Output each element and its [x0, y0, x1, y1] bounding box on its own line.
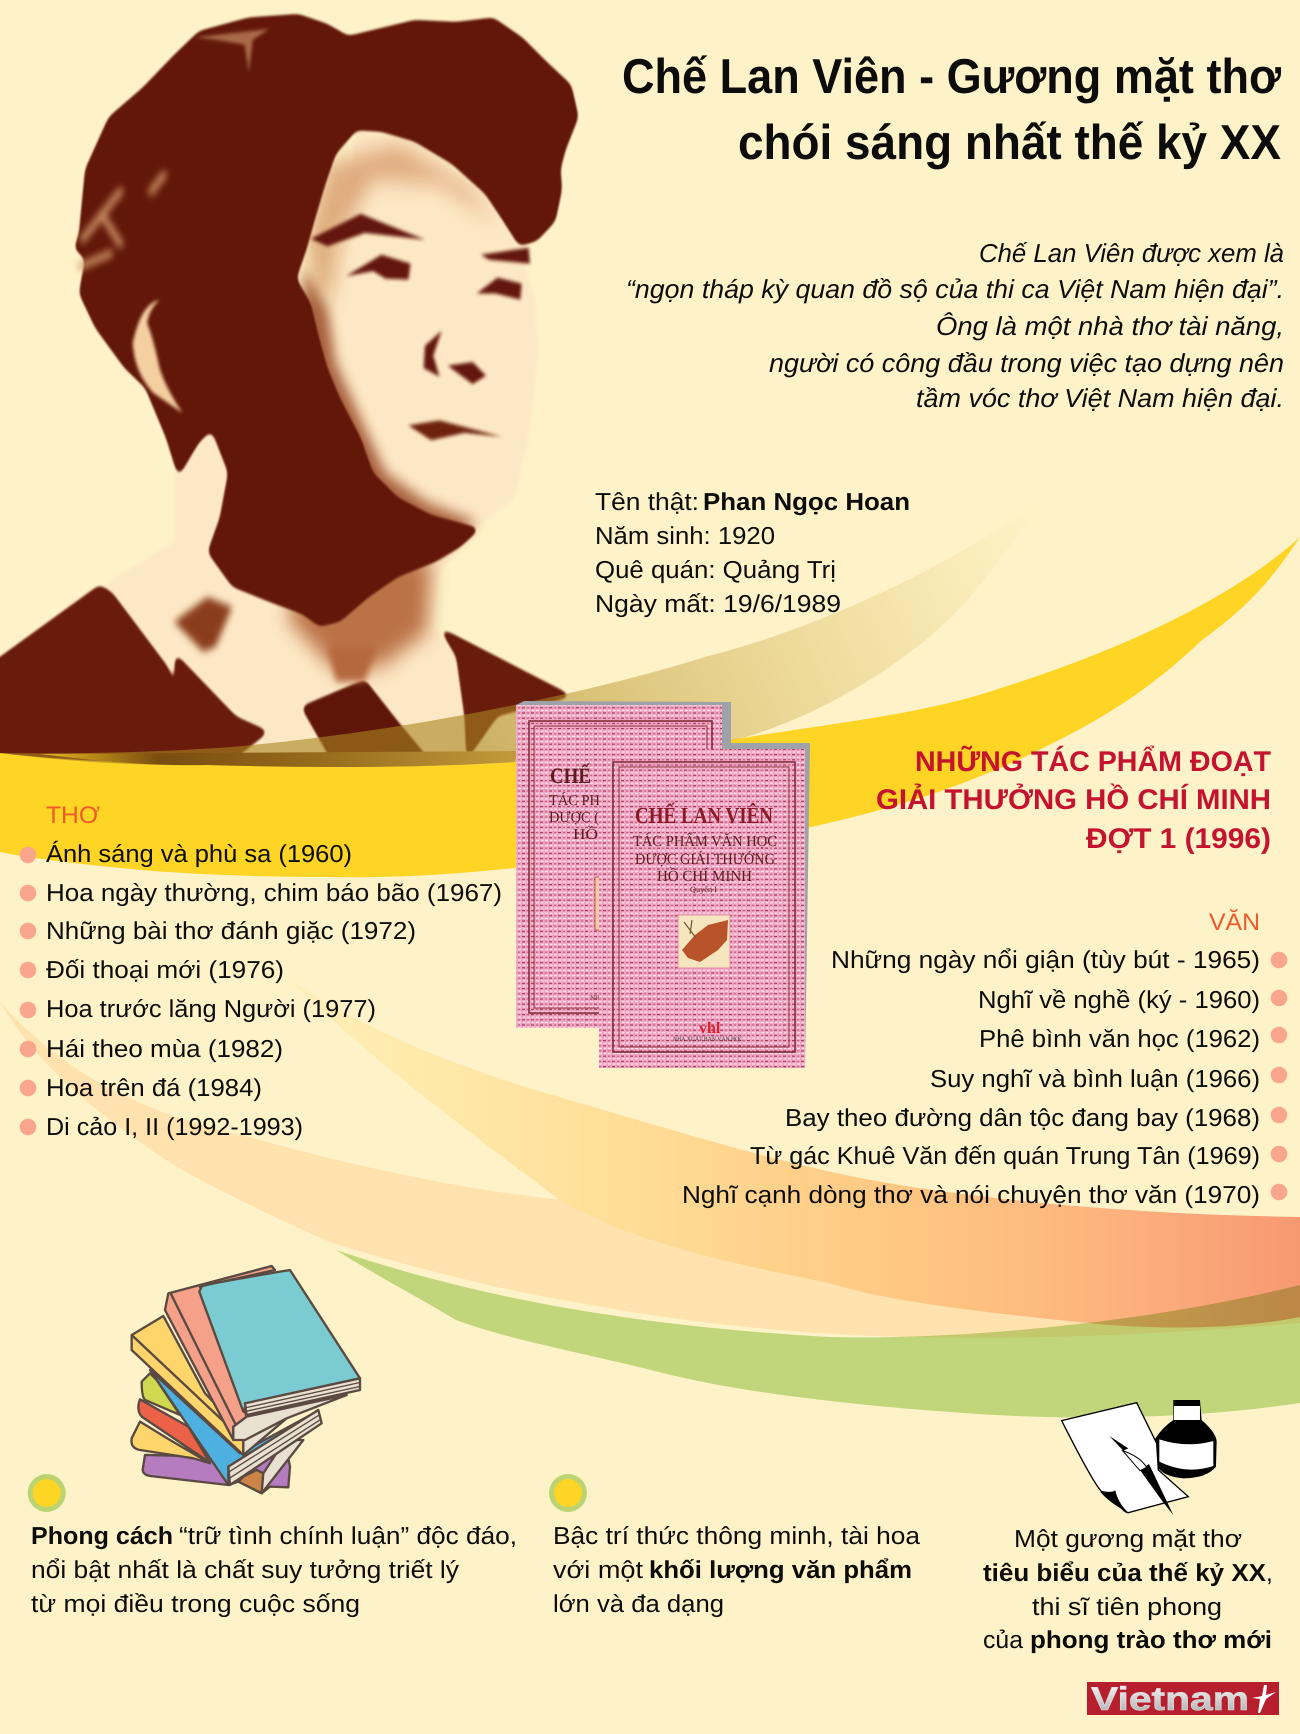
prose list	[682, 909, 1287, 1209]
intro quote: tầm vóc thơ Việt Nam hiện đại.	[916, 383, 1284, 413]
front book	[599, 743, 810, 1068]
mouth	[408, 420, 502, 440]
paper	[1062, 1403, 1188, 1513]
award heading: ĐỢT 1 (1996)	[1086, 823, 1271, 855]
biography facts: Năm sinh: 1920	[595, 523, 775, 550]
hair highlights left	[81, 175, 164, 266]
skin and collar	[104, 130, 539, 754]
ribbon: yellow	[0, 537, 1300, 877]
logo: Vietnam+: Vietnam	[1091, 1680, 1249, 1717]
legacy point: ,	[1266, 1560, 1273, 1587]
intro quote: Ông là một nhà thơ tài năng,	[936, 311, 1284, 341]
prose list: Nghĩ về nghề (ký - 1960)	[978, 987, 1260, 1014]
front book: HỒ CHÍ MINH	[657, 867, 752, 885]
bullet	[549, 1474, 587, 1512]
intro quote: “ngọn tháp kỳ quan đồ sộ của thi ca Việt Nam hiện đại”.	[626, 274, 1284, 304]
pen	[1109, 1436, 1173, 1515]
poetry heading: THƠ	[46, 802, 100, 829]
back book: CHẾ	[550, 763, 591, 788]
prose list: Những ngày nổi giận (tùy bút - 1965)	[831, 947, 1260, 974]
tie	[301, 679, 431, 761]
prose list: Bay theo đường dân tộc đang bay (1968)	[785, 1105, 1260, 1132]
ribbon: pale peach	[0, 1002, 1300, 1338]
intro quote: người có công đầu trong việc tạo dựng nên	[769, 348, 1284, 378]
portrait photo	[0, 14, 579, 761]
ear	[133, 300, 182, 413]
front book: Quyển I	[690, 885, 717, 894]
back book: ĐƯỢC (	[549, 810, 599, 826]
back book	[516, 701, 731, 1028]
legacy point: tiêu biểu của thế kỷ XX	[983, 1560, 1267, 1587]
biography facts: Ngày mất: 19/6/1989	[595, 591, 841, 618]
cover artwork	[678, 915, 730, 968]
award heading: NHỮNG TÁC PHẨM ĐOẠT	[915, 745, 1272, 778]
book covers	[516, 701, 810, 1068]
jacket right	[437, 626, 574, 761]
intellect point: khối lượng văn phẩm	[649, 1557, 912, 1584]
ribbon overlap strip	[40, 751, 520, 767]
left eye	[346, 255, 410, 280]
cheek shadow edge	[303, 269, 477, 552]
style point	[28, 1474, 517, 1618]
hair highlight top	[195, 29, 269, 72]
intellect point: lớn và đa dạng	[553, 1591, 724, 1618]
back book: TÁC PH	[549, 792, 600, 809]
poetry list: Những bài thơ đánh giặc (1972)	[46, 918, 416, 945]
title	[622, 50, 1281, 170]
right eye	[477, 278, 522, 299]
intro quote: Chế Lan Viên được xem là	[979, 238, 1284, 268]
poetry list	[20, 802, 502, 1141]
logo: Vietnam+	[1087, 1680, 1279, 1717]
back book: NHÀ	[590, 993, 605, 1002]
front book: ĐƯỢC GIẢI THƯỞNG	[635, 850, 775, 868]
intellect point: Bậc trí thức thông minh, tài hoa	[553, 1523, 920, 1550]
front book: CHẾ LAN VIÊN	[635, 802, 773, 828]
award heading: GIẢI THƯỞNG HỒ CHÍ MINH	[876, 783, 1271, 816]
biography facts: Quê quán: Quảng Trị	[595, 557, 836, 584]
legacy point: của	[983, 1627, 1023, 1654]
poetry list: Hoa trước lăng Người (1977)	[46, 996, 376, 1023]
intro quote	[626, 238, 1284, 413]
biography facts: Tên thật:	[595, 489, 699, 516]
style point: Phong cách	[31, 1523, 173, 1550]
style point: từ mọi điều trong cuộc sống	[31, 1591, 360, 1618]
jacket left	[0, 585, 269, 761]
award heading	[876, 745, 1272, 855]
poetry list: Hoa trên đá (1984)	[46, 1075, 262, 1102]
ribbon: orange gradient	[290, 980, 1300, 1327]
hair and face shadow	[74, 14, 579, 627]
front book: NHÀ XUẤT BẢN VĂN HỌC	[673, 1035, 743, 1043]
back book: HỒ	[573, 825, 598, 843]
neck shading	[286, 557, 431, 667]
nose	[424, 331, 442, 377]
prose heading: VĂN	[1209, 909, 1260, 936]
legacy point: Một gương mặt thơ	[1014, 1526, 1242, 1553]
legacy point	[983, 1526, 1273, 1654]
icon: paper, pen and ink bottle	[1062, 1400, 1217, 1515]
front book: TÁC PHẨM VĂN HỌC	[633, 832, 777, 850]
biography facts	[595, 489, 910, 618]
prose list: Từ gác Khuê Văn đến quán Trung Tân (1969)	[750, 1143, 1260, 1170]
right eyebrow	[481, 248, 530, 264]
nostril	[448, 362, 486, 384]
ink bottle	[1155, 1400, 1217, 1478]
prose list: Nghĩ cạnh dòng thơ và nói chuyện thơ văn (1970)	[682, 1182, 1260, 1209]
poetry list: Hoa ngày thường, chim báo bão (1967)	[46, 880, 502, 907]
forehead shading	[307, 144, 498, 298]
prose list: Suy nghĩ và bình luận (1966)	[930, 1066, 1260, 1093]
poetry list: Ánh sáng và phù sa (1960)	[46, 840, 352, 868]
left eyebrow	[311, 214, 425, 246]
intellect point	[549, 1474, 920, 1618]
poetry list: Hái theo mùa (1982)	[46, 1036, 283, 1063]
legacy point: thi sĩ tiên phong	[1032, 1594, 1222, 1621]
style point: nổi bật nhất là chất suy tưởng triết lý	[31, 1557, 460, 1584]
poetry list: Đối thoại mới (1976)	[46, 957, 284, 984]
poetry list: Di cảo I, II (1992-1993)	[46, 1114, 303, 1141]
ribbon: green	[336, 1250, 1300, 1417]
tie knot shadow	[328, 647, 377, 682]
legacy point: phong trào thơ mới	[1030, 1627, 1272, 1654]
biography facts: Phan Ngọc Hoan	[703, 489, 910, 516]
icon: stack of books	[131, 1266, 360, 1493]
bullet	[28, 1474, 66, 1512]
prose list: Phê bình văn học (1962)	[979, 1026, 1260, 1053]
style point: “trữ tình chính luận” độc đáo,	[179, 1523, 517, 1550]
front book: vhl	[699, 1020, 721, 1037]
collar shadow	[174, 597, 232, 652]
ribbon: translucent tan	[0, 497, 1045, 767]
intellect point: với một	[553, 1557, 643, 1584]
